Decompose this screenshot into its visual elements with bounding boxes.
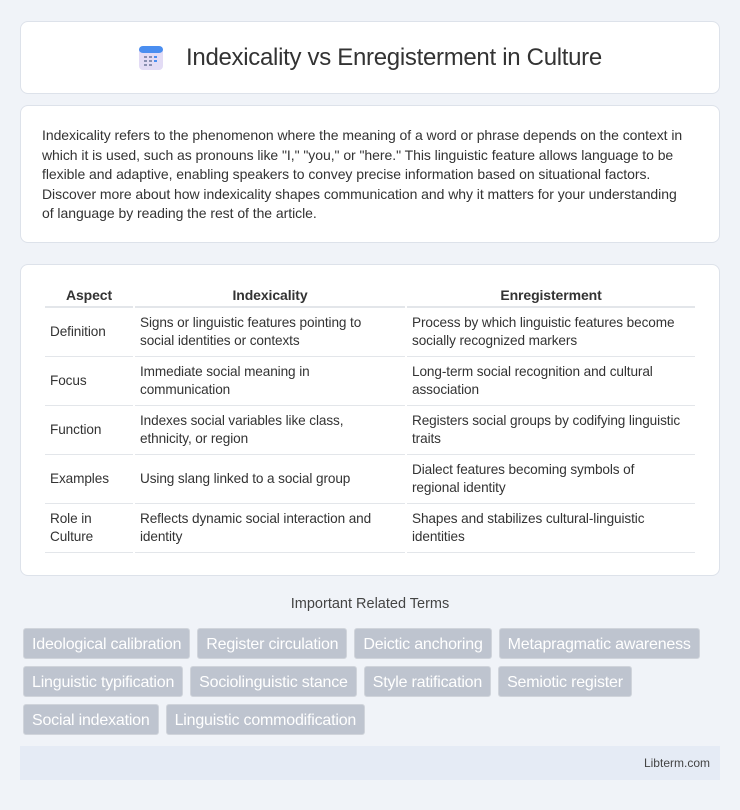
footer bbox=[20, 746, 720, 780]
tag list: Linguistic typification bbox=[32, 674, 174, 691]
panel: comparison table: Shapes and stabilizes cultural-linguistic identities bbox=[412, 511, 644, 544]
title card bbox=[20, 21, 720, 94]
panel: comparison table: Definition bbox=[50, 324, 106, 339]
tag list: Style ratification bbox=[373, 674, 482, 691]
panel: comparison table: Aspect bbox=[66, 286, 112, 302]
tag list: Linguistic commodification bbox=[175, 712, 356, 729]
panel: comparison table bbox=[20, 264, 720, 576]
heading: Indexicality vs Enregisterment in Culture bbox=[186, 44, 602, 70]
panel: comparison table: Focus bbox=[50, 373, 87, 388]
panel: comparison table: Function bbox=[50, 422, 101, 437]
panel: comparison table: Long-term social recognition and cultural association bbox=[412, 364, 653, 397]
panel: comparison table: Indexes social variables like class, ethnicity, or region bbox=[140, 413, 343, 446]
tag list: Sociolinguistic stance bbox=[199, 674, 348, 691]
icon: calendar bbox=[139, 46, 163, 70]
panel: comparison table: Enregisterment bbox=[500, 286, 602, 302]
tag list: Deictic anchoring bbox=[363, 636, 483, 653]
panel: comparison table: Indexicality bbox=[232, 286, 308, 302]
panel: comparison table: Reflects dynamic social interaction and identity bbox=[140, 511, 371, 544]
tag list: Metapragmatic awareness bbox=[508, 636, 691, 653]
panel: comparison table: Using slang linked to a social group bbox=[140, 471, 350, 486]
intro text block: Indexicality refers to the phenomenon where the meaning of a word or phrase depends on the context in which it is used, such as pronouns like "I," "you," or "here." This linguistic feature allows language to be flexible and adaptive, enabling speakers to convey precise information based on situational factors. Discover more about how indexicality shapes communication and why it matters for your understanding of language by reading the rest of the article. bbox=[42, 127, 682, 221]
panel: comparison table: Role in Culture bbox=[50, 511, 93, 544]
panel: comparison table: Registers social groups by codifying linguistic traits bbox=[412, 413, 680, 446]
tag list: Semiotic register bbox=[507, 674, 623, 691]
footer: Libterm.com bbox=[644, 756, 710, 770]
panel: comparison table: Immediate social meaning in communication bbox=[140, 364, 310, 397]
tag list: Social indexation bbox=[32, 712, 150, 729]
tag list: Ideological calibration bbox=[32, 636, 181, 653]
intro text block bbox=[20, 105, 720, 243]
heading: related terms: Important Related Terms bbox=[291, 596, 449, 612]
panel: comparison table: Signs or linguistic features pointing to social identities or contexts bbox=[140, 315, 361, 348]
panel: comparison table: Dialect features becoming symbols of regional identity bbox=[412, 462, 634, 495]
tag list bbox=[23, 628, 700, 735]
panel: comparison table: Examples bbox=[50, 471, 109, 486]
tag list: Register circulation bbox=[206, 636, 338, 653]
panel: comparison table: Process by which linguistic features become socially recognized markers bbox=[412, 315, 674, 348]
